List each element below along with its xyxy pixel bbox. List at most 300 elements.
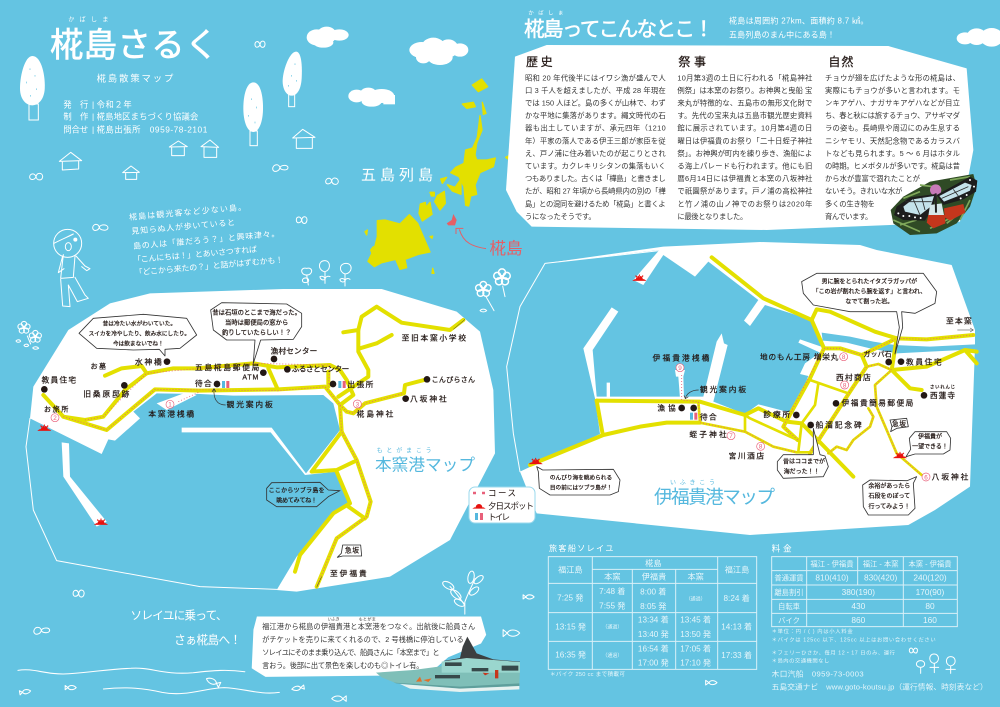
- fish: [291, 685, 304, 691]
- callout: old shoreline: 昔はココまでが: [783, 457, 825, 465]
- history heading: 歴史: [526, 55, 553, 69]
- toilet icon 1: [222, 381, 229, 388]
- land: [507, 242, 975, 535]
- place labels: 教員住宅: [42, 375, 76, 385]
- imprint: |: [92, 112, 94, 122]
- timetable: [548, 543, 757, 685]
- imprint: |: [92, 99, 94, 109]
- house 1: [59, 152, 82, 170]
- timetable cells: 13:34 着: [638, 615, 669, 625]
- legend: [469, 487, 535, 523]
- callout: slope tag: 急坂: [345, 546, 359, 555]
- callout: stone wall: [211, 303, 302, 363]
- walking course: [63, 363, 404, 587]
- place labels: 船溜記念碑: [816, 420, 862, 430]
- size note: 五島列島のまん中にある島！: [729, 30, 835, 40]
- arrow to Motogama: [957, 328, 973, 332]
- butterfly 3: [93, 224, 108, 230]
- size note: 椛島は周囲約 27km、面積約 8.7 ㎢。: [729, 15, 868, 25]
- sea outline: [26, 418, 277, 589]
- place labels: 待合: [700, 411, 717, 421]
- Fukue island: [368, 215, 430, 269]
- route numbers: 1: [168, 402, 172, 409]
- timetable cells: 13:50 発: [680, 630, 711, 639]
- nature text: ち、春と秋には旅するチョウ、アサギマダ: [825, 111, 961, 120]
- fare table: [772, 543, 988, 692]
- callout: stone steps: 余裕があったら: [868, 482, 910, 490]
- place labels: 地のもん工房 増栄丸: [760, 351, 839, 361]
- callout: sea view: のんびり海を眺められる: [550, 474, 612, 482]
- history text: では 150 人ほど。島の多くが山林で、わず: [525, 98, 666, 107]
- nature text: チョウが翅を広げたような形の椛島は、: [825, 73, 960, 82]
- butterfly 1: [255, 41, 265, 47]
- history text: [525, 73, 666, 221]
- nature text: トなども見られます。5 ～ 6 月はホタル: [825, 149, 960, 158]
- contact: 木口汽船 0959-73-0003: [772, 669, 864, 679]
- imprint: 椛島地区まちづくり協議会: [97, 112, 199, 122]
- festival text: 曜日は伊福貴のお祭り「二十日蛭子神社: [677, 136, 813, 145]
- legend: トイレ: [488, 512, 510, 522]
- legend: 夕日スポット: [488, 501, 534, 511]
- fare cells: 830(420): [864, 573, 898, 583]
- fish: [205, 676, 221, 687]
- timetable cells: 伊福貴: [642, 571, 666, 581]
- place labels: [653, 315, 972, 482]
- festival text: に最後となりました。: [677, 212, 747, 221]
- map title: [375, 446, 475, 475]
- route numbers: 8: [759, 444, 763, 451]
- map title: 伊福貴港マップ: [654, 486, 775, 507]
- house 3: [169, 141, 187, 156]
- land: [30, 289, 495, 592]
- title ruby: かばしま: [68, 16, 108, 24]
- place labels: 伊福貴簡易郵便局: [842, 397, 913, 407]
- callout: view of Tsubura: 眺めてみてね！: [276, 496, 317, 504]
- festival text: 暦6月14日には伊福貴と本窯の八坂神社: [677, 174, 813, 183]
- channel: [822, 333, 975, 353]
- callout: old shoreline: 海だった！！: [784, 467, 820, 475]
- fish: [65, 686, 76, 690]
- nature text: 実際にもチョウが多いと言われます。モ: [825, 86, 960, 95]
- ferry description: 福江港から椛島の伊福貴港と本窯港をつなぐ。出航後に船員さん: [262, 622, 475, 631]
- fare cells: バイク: [778, 616, 800, 625]
- legend toilet: [475, 513, 483, 520]
- place labels: 漁村センター: [271, 345, 317, 355]
- place labels: 出張所: [347, 379, 374, 389]
- fare cells: 160: [923, 615, 937, 625]
- route numbers: [51, 400, 361, 422]
- timetable cells: （通過）: [602, 624, 622, 631]
- place labels: 本窯港桟橋: [148, 408, 194, 418]
- butterfly 4: [273, 165, 288, 171]
- timetable note: ＊バイク 250 cc まで積載可: [550, 670, 625, 678]
- timetable cells: 8:05 発: [640, 602, 666, 611]
- history text: 島」との混同を避けるため「椛島」と書くよ: [525, 199, 666, 208]
- arrow to Kabashima: [456, 228, 486, 249]
- history text: え、戸ノ浦に住み着いたのが起こりとされ: [525, 149, 666, 158]
- arrow to info board: [212, 389, 226, 405]
- history text: 口 3 千人を超えましたが、平成 28 年現在: [525, 86, 666, 95]
- imprint: [63, 99, 208, 134]
- place labels: こんぴらさん: [432, 376, 475, 384]
- callout: viewpoint: 一望できる！: [912, 444, 948, 451]
- timetable title: 旅客船ソレイユ: [549, 543, 613, 553]
- tree 1: [20, 56, 45, 120]
- flower c: [340, 263, 351, 286]
- greeting note: 椛島は観光客など少ない島。: [129, 202, 246, 222]
- timetable cells: 福江島: [725, 564, 749, 574]
- cloud 3: [348, 88, 395, 107]
- route numbers: 7: [729, 433, 733, 440]
- arrow to info board: [684, 390, 699, 399]
- callout: sea view: [537, 467, 620, 495]
- Motogama pier: [157, 392, 197, 410]
- wave 1: [18, 668, 245, 674]
- festival text: と竹ノ浦の山ノ神でのお祭りは2020年: [677, 199, 812, 208]
- decorations: trees houses clouds butterflies: [20, 27, 468, 230]
- fare cells: 自転車: [778, 602, 800, 611]
- imprint: 令和２年: [97, 99, 132, 109]
- callout: stone steps: 行ってみよう！: [869, 502, 910, 510]
- title: 椛島さるく: [50, 28, 218, 65]
- callout: stone steps: [863, 477, 917, 515]
- size note: [729, 15, 868, 40]
- nature text: ないそう。きれいな水が: [825, 187, 903, 196]
- flower cluster left: [16, 321, 41, 349]
- flower a: [302, 268, 312, 285]
- history text: 器も出土していますが、承元四年（1210: [525, 124, 666, 133]
- fare cells: 810(410): [815, 573, 849, 583]
- legend course: [473, 492, 485, 494]
- heading: Goto Islands label: 五島列島: [361, 167, 433, 184]
- Nakadori island: [451, 116, 495, 206]
- callout: Gappa rock: 男に腕をとられたイタズラガッパが: [822, 277, 917, 285]
- house 5: [293, 129, 315, 148]
- callout: spring water: スイカを冷やしたり、飲み水にしたり。: [89, 329, 190, 337]
- tagline: さぁ椛島へ！: [174, 633, 241, 647]
- place labels: ATM: [242, 374, 259, 381]
- place labels: 蛭子神社: [689, 429, 727, 439]
- place labels: 診療所: [763, 409, 790, 419]
- greeting note: 島の人は「誰だろう？」と興味津々。: [133, 228, 280, 251]
- timetable cells: 16:54 着: [638, 643, 669, 653]
- ruby: いふき: [328, 616, 340, 621]
- place labels: 待合: [195, 378, 212, 388]
- fish: [19, 689, 31, 695]
- fare cells: 860: [851, 615, 866, 625]
- timetable grid: [548, 557, 757, 669]
- festival text: 祭」。お神輿が町内を練り歩き、漁船によ: [677, 149, 812, 158]
- callout: view of Tsubura: ここからツブラ島を: [269, 486, 325, 494]
- ferry description: 言おう。後部に出て景色を楽しむのも◎トイレ有。: [262, 661, 423, 670]
- place labels: 椛島神社: [357, 408, 394, 418]
- fare cells: 福江 - 本窯: [863, 559, 899, 568]
- route numbers: 8: [842, 354, 846, 361]
- place labels: 伊福貴港桟橋: [653, 352, 710, 362]
- roads: [530, 257, 977, 477]
- butterfly 5: [326, 178, 338, 184]
- place labels: 至伊福貴: [330, 568, 367, 578]
- timetable cells: 8:00 着: [640, 586, 666, 596]
- timetable cells: 13:15 発: [555, 622, 586, 631]
- ferry description: [262, 622, 475, 670]
- timetable cells: 7:48 着: [599, 586, 625, 596]
- timetable cells: 7:55 発: [599, 601, 625, 610]
- route numbers: [676, 353, 930, 481]
- timetable cells: 14:13 着: [721, 622, 752, 632]
- house 4: [201, 140, 219, 157]
- sea outline: [507, 251, 659, 472]
- road end arrow: [317, 319, 465, 587]
- fare cells: 普通運賃: [774, 574, 804, 583]
- festival text: 例祭」は本窯のお祭り。お神輿と曳船 宝: [677, 86, 812, 95]
- fare cells: 380(190): [842, 587, 875, 597]
- top right small cloud: [957, 28, 1000, 47]
- Goto Islands map: [365, 79, 523, 273]
- place labels: 観光案内板: [700, 384, 746, 394]
- greeting note: 見知らぬ人が歩いていると: [131, 217, 235, 236]
- place labels: ガッパ石: [863, 350, 892, 359]
- timetable cells: 17:10 発: [680, 659, 711, 668]
- butterfly photo: [891, 174, 977, 235]
- left breakwater: [62, 442, 107, 527]
- callout: slope: 急坂: [892, 419, 906, 428]
- wave 2: [103, 688, 279, 694]
- legend: コース: [488, 488, 516, 498]
- ferry illustration: [376, 637, 520, 692]
- flowers by note: [302, 261, 351, 286]
- tree 3: [243, 82, 263, 146]
- timetable cells: [555, 558, 752, 668]
- flower cluster right: [476, 269, 510, 312]
- flower b: [319, 261, 330, 283]
- nature text: から水が豊富で涸れたことが: [825, 174, 921, 183]
- place labels: 水神橋: [135, 356, 162, 366]
- fare notes: [772, 627, 936, 664]
- sunset spot 2: [94, 519, 108, 525]
- imprint: 椛島出張所 0959-78-2101: [97, 124, 208, 134]
- place labels: 八坂神社: [932, 472, 969, 482]
- festival text: 10月第3週の土日に行われる「椛島神社: [677, 73, 813, 82]
- callout: spring water: 昔は冷たい水がわいていた。: [103, 319, 176, 327]
- fish: [332, 696, 346, 701]
- plant: [441, 571, 485, 614]
- callout: stone wall: 釣りしていたらしい！？: [222, 327, 291, 336]
- place labels: 五島椛島郵便局: [195, 362, 259, 372]
- fare notes: ＊単位：円 / ( ) 内は小人料金: [772, 627, 853, 635]
- callout: viewpoint: 伊福貴が: [918, 433, 942, 441]
- nature heading: 自然: [828, 54, 853, 69]
- timetable cells: 13:40 発: [638, 630, 669, 639]
- sunset spot 1: [38, 425, 51, 431]
- place dots: [41, 356, 430, 402]
- fare cells: [774, 559, 952, 625]
- festival text: る海上パレードも行われます。他にも旧: [677, 161, 812, 170]
- timetable cells: 本窯: [688, 571, 704, 581]
- ruby: [328, 615, 376, 621]
- history text: うになったそうです。: [525, 212, 596, 221]
- map title: 本窯港マップ: [375, 456, 475, 475]
- title ruby: かばしま: [528, 9, 563, 17]
- timetable cells: 16:35 発: [555, 651, 586, 660]
- sunset spot 3: [893, 452, 907, 458]
- tree 2: [283, 52, 302, 107]
- callout: viewpoint: [906, 432, 951, 457]
- greeting note: [129, 202, 284, 277]
- place labels: 教員住宅: [906, 356, 942, 366]
- route numbers: 2: [53, 415, 57, 422]
- callout: slope: [890, 418, 908, 432]
- history text: つもありました。古くは「樺島」と書きまし: [525, 174, 666, 183]
- fare cells: 240(120): [913, 573, 947, 583]
- fare cells: 離島割引: [774, 588, 804, 597]
- ferry description: ソレイユにそのまま乗り込んで、船員さんに「本窯まで」と: [262, 648, 440, 657]
- place labels: ふるさとセンター: [292, 365, 349, 374]
- butterfly: [34, 627, 50, 634]
- cloud 2: [409, 38, 468, 65]
- history text: 昭和 20 年代後半にはイワシ漁が盛んで人: [525, 73, 666, 82]
- map panel: Motogama port: [26, 289, 495, 592]
- fare cells: 本窯 - 伊福貴: [908, 559, 952, 568]
- toilet icon 2: [338, 381, 346, 388]
- Kabashima red: [447, 214, 457, 225]
- tagline: [130, 609, 241, 647]
- callout: sea view: 目の前にはツブラ島が！: [550, 484, 612, 492]
- ferry description: がチケットを売りに来てくれるので、2 号桟橋に停泊している: [262, 635, 464, 644]
- cloud 1: [307, 27, 349, 48]
- route numbers: 3: [356, 401, 360, 408]
- timetable cells: （通過）: [686, 595, 706, 602]
- callout: Gappa rock: 「この岩が割れたら腕を返す」と言われ、: [813, 287, 926, 295]
- Kabashima label: 椛島: [489, 239, 523, 258]
- timetable cells: 椛島: [645, 558, 661, 568]
- person illustration: [54, 229, 90, 307]
- section title: 椛島ってこんなとこ！: [524, 18, 714, 41]
- fare notes: ＊フェリーひさか、毎月 12・17 日のみ、運行: [772, 648, 896, 656]
- place labels: 漁協: [657, 402, 676, 412]
- place labels: 宮川酒店: [729, 450, 764, 460]
- route numbers: 6: [924, 474, 928, 481]
- imprint: |: [92, 124, 94, 134]
- ruby: もとがま: [359, 615, 376, 621]
- callout: stone wall: 昔は石垣のとこまで海だった。: [212, 307, 301, 316]
- timetable cells: 17:00 発: [638, 659, 669, 668]
- route numbers: 9: [678, 365, 682, 372]
- white info panel: [506, 45, 973, 230]
- history text: 年）平家の落人である伊王三郎が家臣を従: [525, 136, 666, 145]
- place labels: 西村商店: [836, 372, 871, 382]
- map title: いふきこう: [670, 479, 715, 486]
- timetable cells: （通過）: [602, 652, 622, 659]
- timetable cells: 福江島: [558, 564, 583, 574]
- fare cells: 福江 - 伊福貴: [810, 559, 854, 568]
- place labels: 旧桑原邸跡: [83, 389, 130, 399]
- festival text: 来丸が特徴的な、五島市の無形文化財で: [677, 98, 812, 107]
- callout: old shoreline: [777, 428, 828, 478]
- roads: [43, 307, 463, 587]
- place labels: 観光案内板: [227, 399, 273, 409]
- map panel: Ifuki port: [507, 242, 977, 535]
- place dots: [678, 358, 927, 428]
- header block: title and imprint: [50, 16, 218, 134]
- route numbers: 8: [843, 382, 847, 389]
- history text: ています。カクレキリシタンの集落もいく: [525, 161, 666, 170]
- callout: Gappa rock: [802, 273, 937, 354]
- butterfly 2: [30, 173, 43, 180]
- fare cells: 430: [851, 601, 866, 611]
- fare cells: 170(90): [916, 587, 945, 597]
- Ifuki pier: [675, 370, 685, 398]
- fish: [523, 595, 534, 599]
- timetable cells: 本窯: [604, 571, 620, 581]
- callout: spring water: 今は飲まないでね！: [113, 339, 164, 347]
- sunset spot 2: [633, 275, 646, 281]
- festival text: す。先代の宝来丸は五島市観光歴史資料: [677, 111, 813, 120]
- sea: [507, 250, 823, 472]
- timetable cells: 13:45 着: [680, 615, 711, 625]
- house 2: [123, 166, 139, 179]
- callout: spring water: [79, 314, 197, 356]
- fare grid: [772, 557, 957, 627]
- timetable cells: 17:33 着: [721, 650, 752, 660]
- festival text: で祇園祭があります。戸ノ浦の高松神社: [677, 187, 813, 196]
- timetable cells: 7:25 発: [557, 594, 583, 603]
- sunset spot 1: [529, 458, 542, 464]
- fish: [503, 630, 520, 637]
- nature text: 育んでいます。: [825, 212, 872, 221]
- nature text: ニシヤモリ、天然記念物であるカラスバ: [825, 136, 961, 145]
- place labels: さいれんじ: [930, 383, 955, 390]
- subtitle: 椛島散策マップ: [97, 73, 174, 84]
- butterfly 6: [296, 217, 307, 223]
- place labels: 至旧本窯小学校: [402, 332, 466, 342]
- nature text: 多くの生き物を: [825, 199, 875, 208]
- fare title: 料金: [772, 543, 792, 554]
- ferry text box: [252, 617, 486, 677]
- timetable cells: 17:05 着: [680, 643, 711, 653]
- place labels: 八坂神社: [410, 394, 447, 404]
- nature text: ラの姿も。長崎県や周辺にのみ生息する: [825, 124, 960, 133]
- imprint: 発 行: [63, 99, 88, 109]
- place labels: [42, 332, 475, 578]
- panel: about Kabashima: [506, 9, 973, 230]
- callout: stone wall: 当時は郵便局の窓から: [225, 317, 288, 326]
- contact: [772, 669, 988, 692]
- callout: view of Tsubura: [267, 482, 340, 507]
- place labels: お旅所: [44, 405, 68, 414]
- toilet icon: [690, 413, 697, 420]
- callout: slope tag: [337, 545, 362, 557]
- callout: Gappa rock: なでて割った岩。: [845, 298, 893, 306]
- festival text: [677, 73, 813, 221]
- nature text: の時期。ヒメボタルが多いです。椛島は昔: [825, 161, 960, 170]
- imprint: 問合せ: [63, 124, 88, 134]
- timetable cells: 8:24 着: [724, 593, 750, 603]
- Hisaka and Naru: [419, 177, 461, 221]
- history text: たが、昭和 27 年頃から長崎県内の別の「樺: [525, 187, 666, 196]
- nature text: ンキアゲハ、ナガサキアゲハなどが目立: [825, 98, 960, 107]
- place labels: 至本窯: [946, 315, 972, 325]
- fare cells: 80: [925, 601, 935, 611]
- imprint: 制 作: [63, 112, 88, 122]
- small flowers and butterfly: [909, 648, 955, 673]
- contact: 五島交通ナビ www.goto-koutsu.jp（運行情報、時刻表など）: [772, 682, 988, 692]
- place labels: お墓: [91, 362, 106, 371]
- northern isles: [365, 79, 511, 273]
- flowers around the maps: [16, 269, 510, 349]
- fare notes: ＊バイクは 125cc 以下、125cc 以上はお問い合わせください: [772, 635, 936, 643]
- festival heading: 祭事: [678, 55, 706, 69]
